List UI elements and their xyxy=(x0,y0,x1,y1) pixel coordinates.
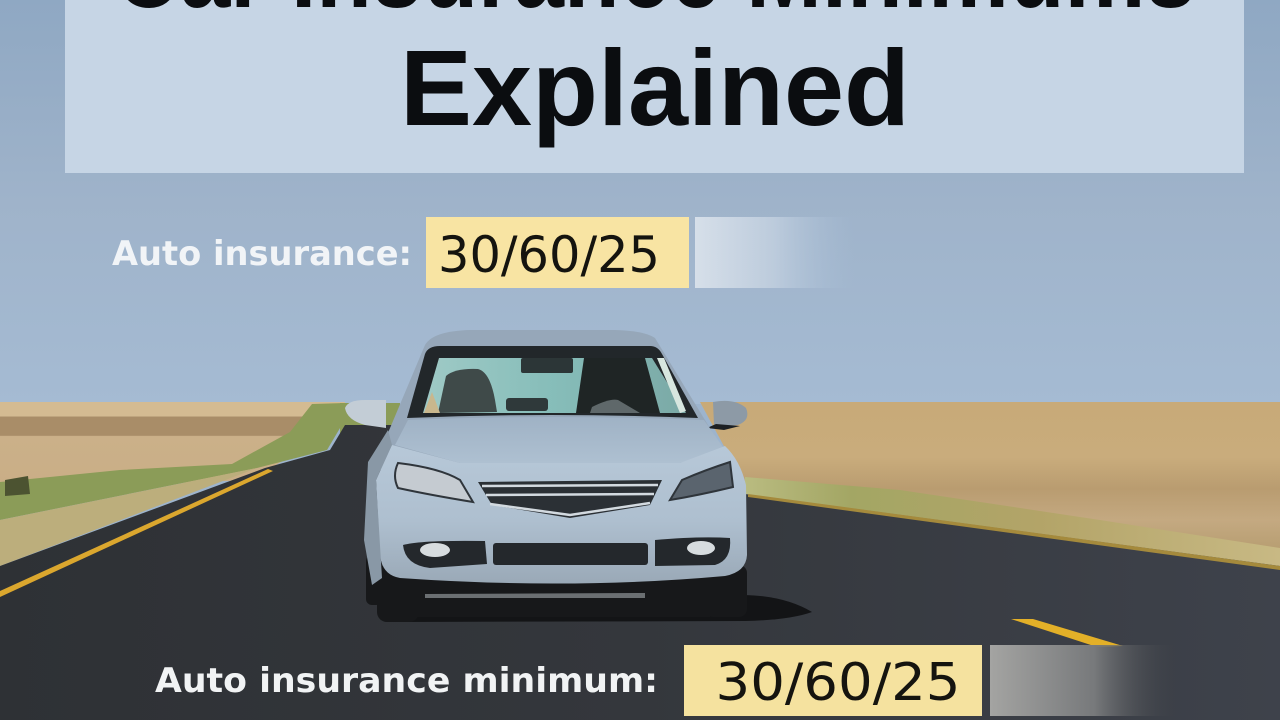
car xyxy=(345,330,812,622)
lower intake and fog lamps xyxy=(403,537,730,568)
lower valance xyxy=(425,593,645,598)
upper label: auto insurance: Auto insurance: xyxy=(112,234,412,274)
upper faded bar xyxy=(695,217,855,288)
background: sky xyxy=(0,0,1280,404)
windshield glass xyxy=(423,358,686,413)
background: left field xyxy=(0,402,400,566)
headlights xyxy=(395,462,733,502)
hood xyxy=(395,417,725,463)
lower value box: 30/60/25 xyxy=(716,653,960,713)
windshield frame xyxy=(407,346,698,418)
grille xyxy=(478,480,662,518)
title text xyxy=(114,0,1196,148)
side body left xyxy=(364,430,392,585)
upper value box: 30/60/25 xyxy=(438,226,660,284)
mirrors xyxy=(345,400,747,430)
lower label: auto insurance minimum: Auto insurance minimum: xyxy=(155,661,658,701)
lower value box xyxy=(684,645,982,716)
cabin and roof xyxy=(380,330,735,470)
upper value box xyxy=(426,217,689,288)
title text: Explained xyxy=(400,27,910,148)
background: right roadside verge xyxy=(745,477,1280,566)
title panel xyxy=(65,0,1244,173)
seats and interior xyxy=(424,358,686,413)
bumper body xyxy=(376,445,747,584)
road xyxy=(0,425,1280,720)
tires xyxy=(366,555,747,622)
lower faded bar xyxy=(990,645,1180,716)
background: right wheat field xyxy=(700,402,1280,560)
road markings xyxy=(0,469,1280,647)
car shadow xyxy=(400,595,812,622)
